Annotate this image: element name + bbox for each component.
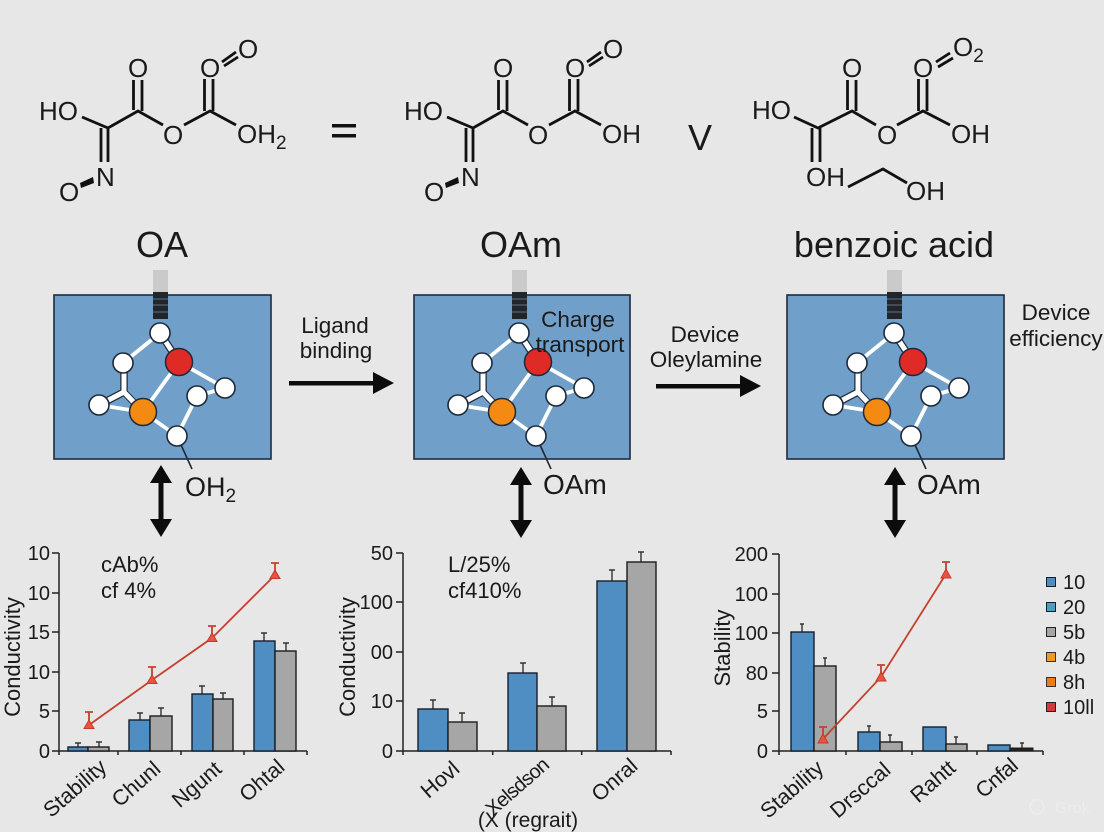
arrow: double vertical two	[510, 467, 532, 538]
x labels: Onral	[587, 754, 642, 806]
structure: OA molecule: O	[163, 120, 183, 150]
label: Device Oleylamine: Oleylamine	[650, 347, 762, 372]
chart: benzoic acid stability: 5	[757, 701, 768, 723]
chart: benzoic acid stability	[710, 544, 1043, 823]
label: Charge transport: transport	[536, 332, 625, 357]
structure: benzoic acid molecule: OH	[906, 176, 945, 206]
structure: OA molecule: O	[59, 177, 79, 207]
axis label: Conductivity	[335, 597, 360, 717]
x labels: Drsccal	[825, 758, 895, 823]
structure: OAm molecule: O	[528, 120, 548, 150]
structure: OA molecule: O	[200, 53, 220, 83]
structure: OA molecule	[39, 34, 287, 207]
letter V separator: V	[688, 117, 712, 158]
annotation: cf410%	[448, 578, 521, 603]
label: Device efficiency: Device	[1022, 300, 1090, 325]
structure: OAm molecule: HO	[404, 96, 443, 126]
bars	[68, 633, 296, 751]
equals sign	[332, 124, 356, 138]
structure: OAm molecule: N	[461, 162, 480, 192]
x labels: Ngunt	[167, 757, 226, 812]
annotation: L/25%	[448, 552, 510, 577]
x labels: Cnfal	[971, 754, 1022, 803]
label: OAm panel two: OAm	[543, 469, 607, 500]
axis label: Conductivity	[0, 597, 25, 717]
chart: benzoic acid stability: 0	[757, 741, 768, 763]
label: Charge transport: Charge	[541, 307, 615, 332]
label: Ligand binding: binding	[300, 338, 372, 363]
panel: OAm ligand model	[414, 270, 630, 469]
panel: benzoic acid ligand model	[787, 270, 1004, 469]
watermark	[1030, 800, 1091, 817]
structure: benzoic acid molecule	[752, 32, 990, 206]
legend: 10ll	[1063, 697, 1094, 719]
bars	[791, 624, 1033, 751]
chart: benzoic acid stability: 100	[735, 623, 768, 645]
structure: benzoic acid molecule: O	[953, 32, 973, 62]
label: Device Oleylamine: Device	[671, 322, 739, 347]
x labels: Stability	[756, 756, 828, 823]
heading: benzoic acid: benzoic acid	[794, 224, 994, 265]
chart: OAm conductivity: 0	[382, 741, 393, 763]
annotation: cf 4%	[101, 578, 156, 603]
structure: OA molecule: 2	[276, 133, 287, 154]
label: OH2: 2	[226, 486, 236, 507]
structure: benzoic acid molecule: OH	[951, 119, 990, 149]
chart: OA conductivity: 10	[28, 583, 50, 605]
chart: OAm conductivity: 10	[371, 691, 393, 713]
legend: 10	[1063, 572, 1085, 594]
trend line	[84, 563, 280, 728]
structure: benzoic acid molecule: O	[877, 120, 897, 150]
label: Device efficiency: efficiency	[1009, 326, 1103, 351]
label: Ligand binding: Ligand	[301, 313, 369, 338]
x labels	[416, 754, 642, 821]
legend: 8h	[1063, 672, 1085, 694]
structure: benzoic acid molecule: O	[842, 53, 862, 83]
x labels: Rahtt	[906, 756, 960, 807]
chart: OAm conductivity	[335, 543, 671, 832]
chart: benzoic acid stability: 100	[735, 584, 768, 606]
arrow: ligand binding	[289, 372, 394, 394]
arrow: device oleylamine	[656, 375, 761, 397]
structure: OA molecule: O	[128, 53, 148, 83]
trend line	[818, 562, 951, 743]
chart: benzoic acid stability: 200	[735, 544, 768, 566]
bars	[418, 552, 656, 751]
chart: OA conductivity	[0, 543, 307, 822]
legend: 4b	[1063, 647, 1085, 669]
structure: OAm molecule	[404, 34, 641, 207]
structure: benzoic acid molecule: O	[913, 53, 933, 83]
arrow: double vertical one	[150, 465, 172, 537]
x labels	[756, 754, 1022, 823]
structure: OAm molecule: O	[493, 53, 513, 83]
structure: OA molecule: O	[238, 34, 258, 64]
structure: OAm molecule: O	[565, 53, 585, 83]
watermark: Grok	[1055, 800, 1091, 817]
heading: OA: OA	[136, 224, 188, 265]
chart: OA conductivity: 0	[39, 741, 50, 763]
chart: OA conductivity: 10	[28, 543, 50, 565]
structure: benzoic acid molecule: 2	[973, 46, 984, 67]
structure: OAm molecule: O	[424, 177, 444, 207]
arrow: double vertical three	[884, 467, 906, 538]
x labels: Stability	[39, 755, 111, 822]
axis label: Stability	[710, 609, 735, 687]
chart: benzoic acid stability: 80	[746, 663, 768, 685]
structure: OAm molecule: O	[603, 34, 623, 64]
x axis title: (X (regrait)	[478, 809, 578, 832]
chart: OA conductivity: 15	[28, 622, 50, 644]
x labels: Xelsdson	[482, 754, 553, 821]
structure: benzoic acid molecule: OH	[806, 162, 845, 192]
chart: OAm conductivity: 100	[360, 592, 393, 614]
chart: OA conductivity: 5	[39, 701, 50, 723]
x labels: Ohtal	[235, 755, 289, 806]
structure: OA molecule: OH	[237, 119, 276, 149]
legend: 5b	[1063, 622, 1085, 644]
legend: 20	[1063, 597, 1085, 619]
annotation: cAb%	[101, 552, 158, 577]
chart: OA conductivity: 10	[28, 662, 50, 684]
label: OAm panel three: OAm	[917, 469, 981, 500]
chart: OAm conductivity: 00	[371, 642, 393, 664]
legend	[1046, 572, 1094, 719]
x labels: Hovl	[416, 757, 464, 803]
structure: OA molecule: N	[96, 162, 115, 192]
x labels: Chunl	[107, 757, 165, 812]
structure: OAm molecule: OH	[602, 119, 641, 149]
panel: OA ligand model	[54, 270, 271, 469]
heading: OAm: OAm	[480, 224, 562, 265]
chart: OAm conductivity: 50	[371, 543, 393, 565]
x labels	[39, 755, 289, 822]
structure: benzoic acid molecule: HO	[752, 95, 791, 125]
label: OH2: OH	[185, 472, 226, 502]
structure: OA molecule: HO	[39, 96, 78, 126]
